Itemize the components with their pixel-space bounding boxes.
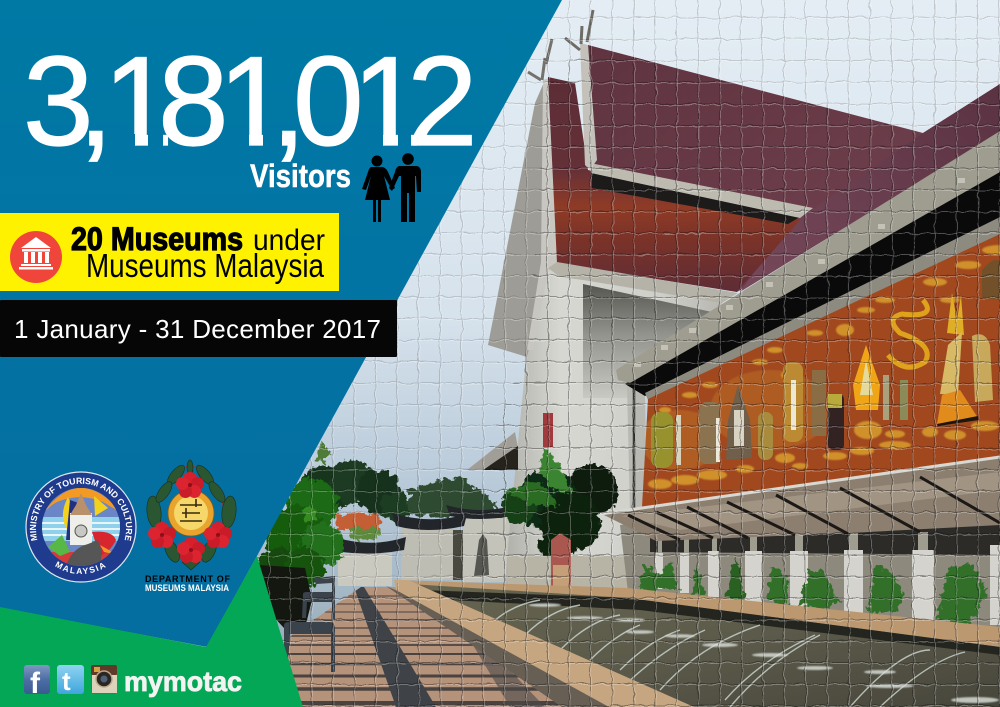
date bar background [0,300,397,357]
yellow banner [0,213,339,291]
main white wall [505,265,725,590]
sky [250,0,1000,707]
right roof [740,84,1000,292]
near ledge top [394,580,694,707]
black fascia beam [625,170,1000,396]
thin beam lip [645,217,1000,400]
canopy edge [600,457,1000,514]
banner line 1 suffix: under [253,224,325,257]
wavy glass grid overlay [250,0,1000,707]
wavy grid on building [282,46,1000,707]
benches [284,576,335,672]
colonnade plants [640,555,988,625]
photo: National Museum building [250,0,1000,707]
canopy glass [600,457,1000,541]
grey gable plane [488,80,558,357]
social handle: mymotac [124,666,242,697]
logo: Department of Museums Malaysia [145,460,238,593]
logo: Ministry of Tourism and Culture Malaysia [25,471,137,583]
icon: facebook [24,665,50,700]
date bar [0,300,397,357]
second dark band [474,646,545,707]
colonnade backdrop [620,480,1000,640]
pillar edge [627,385,647,512]
red wall window [543,413,553,447]
gable finials [528,39,552,80]
banner line 2: Museums Malaysia [86,247,325,284]
logo: Ministry of Tourism and Culture Malaysia: MALAYSIA [55,561,106,574]
walkway base [288,587,562,707]
mural [640,234,1000,507]
palm tree [502,448,618,561]
date text: 1 January - 31 December 2017 [14,314,381,344]
pool [410,584,1000,707]
walkway [288,587,562,707]
pool far-edge shadow [420,590,1000,655]
seal centre [174,496,208,530]
logo ring [26,472,136,582]
grey beam [616,131,1000,383]
logo emblem [42,487,120,566]
garden wall with curved roofs [338,505,516,586]
banner line 1: 20 Museums [71,221,243,257]
logo text arc: Malaysia [47,560,115,574]
icon: museum in red circle [10,231,62,283]
icon: twitter [57,665,84,696]
water splashes [529,603,999,703]
blue diagonal panel [0,0,562,647]
colonnade columns [655,532,1000,625]
upper eave and shadow [592,173,800,224]
walkway stripes [270,596,570,703]
canopy [600,457,1000,541]
icon: facebook: f [30,667,41,700]
canopy beams [628,477,1000,540]
lower eave [548,262,738,303]
icon: man and woman holding hands [362,153,421,222]
wreath stems [158,465,224,565]
shaded recess under the eave [583,284,712,398]
logo: Ministry of Tourism and Culture Malaysia: MINISTRY OF TOURISM AND CULTURE [30,478,132,541]
visitors label: Visitors [250,158,351,194]
mural gold clouds [640,245,1000,489]
hibiscus flowers [148,472,232,563]
icon: twitter: t [62,666,71,696]
far ledge [397,580,1000,647]
distant trees and hill [300,442,505,540]
water jets [490,600,965,707]
seal calligraphy [180,499,202,521]
small gable near entrance [467,432,518,470]
upper roof finial [580,43,597,170]
beam studs [634,178,965,367]
lower wall and shrine [508,533,628,588]
walkway dark band [354,587,436,707]
museums malaysia label: MUSEUMS MALAYSIA [145,583,229,593]
mural panel [642,234,1000,507]
wreath leaves [145,460,238,570]
tree trunks shadow [258,565,312,628]
upper back roof [588,45,1000,292]
icon: instagram [91,665,117,694]
banner background [0,213,339,291]
left foreground tree [257,479,344,588]
gold seal [168,490,214,536]
lower roof [548,77,800,292]
logo text arc: ministry name [36,484,126,542]
mural figures [651,260,1000,468]
visitor count headline: 3,181,012 [23,30,478,172]
near ledge side [386,586,612,707]
department label: DEPARTMENT OF [145,574,230,584]
green corner panel [0,556,303,707]
